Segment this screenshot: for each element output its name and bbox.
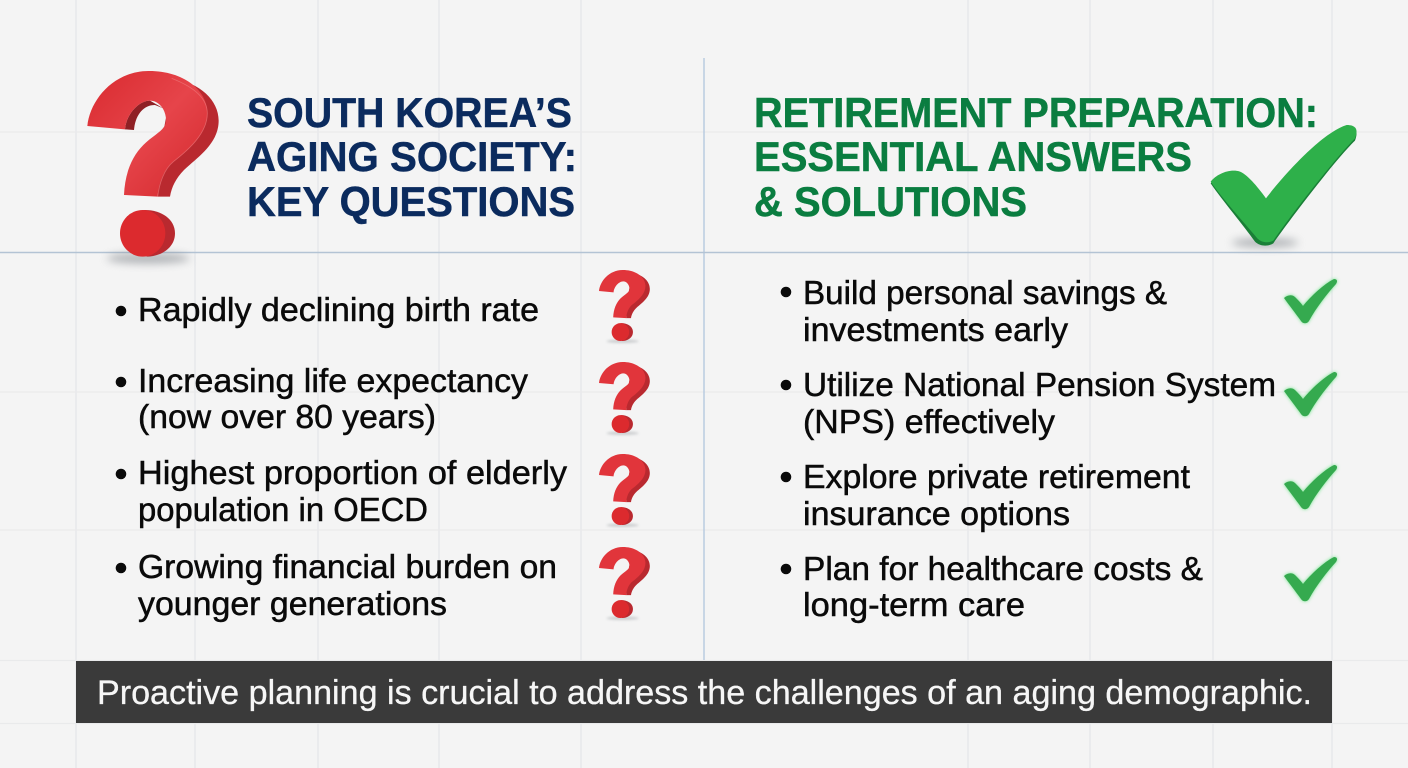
title: right heading: & SOLUTIONS bbox=[754, 178, 1027, 225]
item: private insurance bbox=[781, 459, 1191, 533]
item: financial burden bbox=[116, 549, 557, 623]
title: right heading: ESSENTIAL ANSWERS bbox=[754, 133, 1192, 180]
item: pension: Utilize National Pension System bbox=[803, 367, 1276, 404]
icon: question mark 3 bbox=[599, 454, 650, 527]
icon: question mark 4 bbox=[599, 547, 650, 620]
icon: check 2 bbox=[1284, 372, 1337, 416]
item: elderly population: Highest proportion of elderly bbox=[138, 455, 567, 492]
item: private insurance: Explore private retirement bbox=[803, 459, 1191, 496]
item: declining birth rate: Rapidly declining birth rate bbox=[138, 292, 539, 329]
item: healthcare: Plan for healthcare costs & bbox=[803, 551, 1203, 588]
item: pension bbox=[781, 367, 1276, 441]
icon: check 4 bbox=[1284, 557, 1337, 601]
item: pension: (NPS) effectively bbox=[803, 404, 1055, 441]
panel: questions list bbox=[116, 270, 650, 623]
item: financial burden: younger generations bbox=[138, 586, 447, 623]
item: healthcare bbox=[781, 551, 1203, 624]
callout: conclusion banner: Proactive planning is crucial to address the challenges of an aging demographic. bbox=[97, 674, 1312, 712]
title: left heading bbox=[247, 89, 577, 225]
item: life expectancy: (now over 80 years) bbox=[138, 399, 436, 436]
icon: large red question mark bbox=[87, 71, 219, 264]
item: elderly population: population in OECD bbox=[138, 492, 428, 529]
item: life expectancy bbox=[116, 363, 528, 436]
item: healthcare: long-term care bbox=[803, 587, 1025, 624]
icon: large green check mark bbox=[1211, 125, 1357, 247]
item: private insurance: insurance options bbox=[803, 496, 1070, 533]
icon: check 3 bbox=[1284, 465, 1337, 509]
title: right heading: RETIREMENT PREPARATION: bbox=[754, 89, 1318, 136]
icon: question mark 2 bbox=[599, 362, 650, 435]
title: left heading: KEY QUESTIONS bbox=[247, 178, 575, 225]
panel: answers list bbox=[781, 275, 1337, 624]
item: life expectancy: Increasing life expectancy bbox=[138, 363, 528, 400]
title: right heading bbox=[754, 89, 1318, 225]
item: elderly population bbox=[116, 455, 567, 529]
title: left heading: SOUTH KOREA’S bbox=[247, 89, 572, 136]
icon: question mark 1 bbox=[599, 270, 650, 343]
item: financial burden: Growing financial burden on bbox=[138, 549, 557, 586]
icon: check 1 bbox=[1284, 279, 1337, 323]
callout: conclusion banner bbox=[76, 661, 1332, 723]
item: savings bbox=[781, 275, 1167, 349]
item: savings: Build personal savings & bbox=[803, 275, 1167, 312]
item: savings: investments early bbox=[803, 312, 1068, 349]
title: left heading: AGING SOCIETY: bbox=[247, 133, 577, 180]
